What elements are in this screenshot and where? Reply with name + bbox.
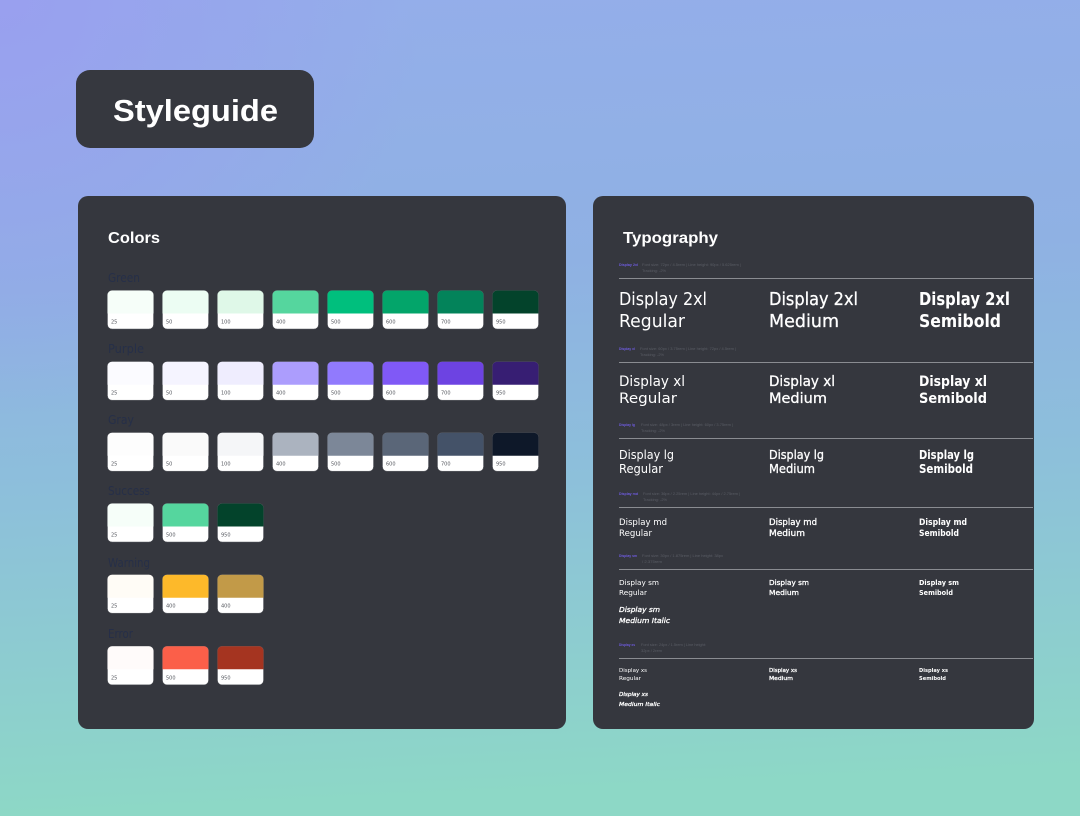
swatch row: purple: 400 (276, 391, 286, 397)
swatch row: purple: 600 (386, 391, 396, 397)
samples: display sm: Regular (619, 589, 647, 597)
spec: display 2xl (619, 262, 1033, 279)
samples: display xl: Medium (769, 391, 827, 407)
samples: display md: Display md (769, 518, 817, 528)
swatch row: purple: 500 (331, 391, 341, 397)
samples: display 2xl: Semibold (919, 312, 1001, 332)
spec: display 2xl: Font size: 72px / 4.5rem | Line height: 90px / 5.625rem | (642, 262, 741, 267)
swatch row: green (108, 290, 538, 329)
swatch row: error: 500 (166, 675, 176, 681)
samples: display md: Display md (619, 518, 667, 528)
section label: purple: Purple (108, 341, 144, 356)
swatch row: gray: 25 (111, 462, 117, 468)
samples: display sm (619, 579, 959, 625)
section label: success: Success (108, 483, 150, 498)
section label: gray: Gray (108, 412, 135, 427)
swatch row: purple: 950 (496, 391, 506, 397)
spec: display sm: Font size: 30px / 1.875rem | Line height: 38px (642, 553, 723, 558)
samples: display xs: Display xs (769, 668, 797, 674)
spec: display xl: Display xl (619, 346, 635, 351)
spec: display xs: Display xs (619, 642, 636, 647)
section label: warning: Warning (108, 555, 150, 570)
samples: display sm: Display sm (619, 606, 660, 614)
title badge (76, 70, 314, 148)
swatch row: green: 700 (441, 320, 451, 326)
spec: display md (619, 491, 1033, 508)
heading: typography: Typography (623, 230, 718, 247)
samples: display lg (619, 448, 974, 476)
samples: display lg: Display lg (619, 448, 674, 462)
swatch row: warning: 400 (166, 604, 176, 610)
swatch row: gray: 600 (386, 462, 396, 468)
samples: display 2xl: Display 2xl (769, 290, 858, 310)
samples: display xl: Regular (619, 391, 677, 407)
samples: display sm: Medium (769, 589, 799, 597)
samples: display lg: Display lg (919, 448, 974, 462)
samples: display md: Display md (919, 518, 967, 528)
swatch row: error (108, 646, 264, 685)
spec: display 2xl: Tracking: -2% (642, 268, 666, 273)
spec: display lg (619, 422, 1033, 439)
spec: display md: Font size: 36px / 2.25rem | Line height: 44px / 2.75rem | (643, 491, 740, 496)
samples: display xl: Display xl (919, 374, 987, 390)
title badge: Styleguide (113, 93, 278, 128)
samples: display xs (619, 668, 949, 708)
swatch row: purple: 700 (441, 391, 451, 397)
samples: display md (619, 518, 967, 539)
samples: display 2xl (619, 290, 1010, 332)
samples: display xs: Display xs (619, 692, 648, 698)
samples: display sm: Display sm (919, 579, 959, 587)
samples: display xl: Display xl (769, 374, 835, 390)
spec: display xl (619, 346, 1033, 363)
swatch row: success: 25 (111, 532, 117, 538)
samples: display xs: Medium Italic (619, 702, 660, 708)
swatch row: gray: 500 (331, 462, 341, 468)
samples: display xl: Semibold (919, 391, 987, 407)
swatch row: green: 600 (386, 320, 396, 326)
samples: display sm: Medium Italic (619, 617, 670, 625)
samples: display md: Medium (769, 529, 805, 539)
samples: display sm: Semibold (919, 589, 953, 597)
spec: display sm: / 2.375rem (642, 559, 663, 564)
swatch row: purple: 100 (221, 391, 231, 397)
spec: display md: Display md (619, 491, 638, 496)
swatch row: purple: 50 (166, 391, 172, 397)
samples: display md: Semibold (919, 529, 959, 539)
samples: display lg: Regular (619, 462, 663, 476)
section label: error: Error (108, 626, 134, 641)
swatch row: warning (108, 575, 264, 613)
samples: display xl: Display xl (619, 374, 685, 390)
swatch row: green: 50 (166, 320, 172, 326)
swatch row: warning: 25 (111, 604, 117, 610)
swatch row: success (108, 504, 264, 542)
swatch row: success: 500 (166, 532, 176, 538)
samples: display xs: Semibold (919, 676, 946, 682)
samples: display lg: Display lg (769, 448, 824, 462)
spec: display xl: Tracking: -2% (640, 352, 664, 357)
swatch row: gray: 50 (166, 462, 172, 468)
samples: display xs: Display xs (619, 668, 647, 674)
samples: display xl (619, 374, 987, 407)
spec: display md: Tracking: -2% (643, 497, 667, 502)
samples: display lg: Semibold (919, 462, 973, 476)
swatch row: gray: 950 (496, 462, 506, 468)
samples: display lg: Medium (769, 462, 815, 476)
spec: display sm (619, 553, 1033, 570)
swatch row: green: 950 (496, 320, 506, 326)
swatch row: error: 950 (221, 675, 231, 681)
samples: display 2xl: Display 2xl (919, 290, 1010, 310)
swatch row: gray (108, 433, 538, 471)
swatch row: green: 100 (221, 320, 231, 326)
spec: display 2xl: Display 2xl (619, 262, 638, 267)
swatch row: gray: 400 (276, 462, 286, 468)
section label: green: Green (108, 270, 140, 285)
samples: display sm: Display sm (769, 579, 809, 587)
spec: display lg: Display lg (619, 422, 635, 427)
swatch row: success: 950 (221, 532, 231, 538)
spec: display lg: Tracking: -2% (641, 428, 665, 433)
panel: colors (78, 196, 566, 729)
swatch row: purple: 25 (111, 391, 117, 397)
samples: display 2xl: Medium (769, 312, 839, 332)
swatch row: gray: 100 (221, 462, 231, 468)
spec: display xs: 32px / 2rem (641, 648, 663, 653)
spec: display xl: Font size: 60px / 3.75rem | Line height: 72px / 4.5rem | (640, 346, 736, 351)
swatch row: gray: 700 (441, 462, 451, 468)
samples: display 2xl: Display 2xl (619, 290, 707, 310)
heading: colors: Colors (108, 230, 160, 247)
swatch row: green: 500 (331, 320, 341, 326)
swatch row: green: 400 (276, 320, 286, 326)
samples: display sm: Display sm (619, 579, 659, 587)
panel: typography (593, 196, 1034, 729)
samples: display xs: Regular (619, 676, 642, 682)
spec: display sm: Display sm (619, 553, 637, 558)
spec: display xs: Font size: 24px / 1.5rem | Line height: (641, 642, 706, 647)
samples: display md: Regular (619, 529, 653, 539)
swatch row: error: 25 (111, 675, 117, 681)
spec: display lg: Font size: 48px / 3rem | Line height: 60px / 3.75rem | (641, 422, 733, 427)
samples: display xs: Medium (769, 676, 793, 682)
swatch row: green: 25 (111, 320, 117, 326)
spec: display xs (619, 642, 1033, 659)
samples: display 2xl: Regular (619, 312, 686, 332)
swatch row: warning: 400 (221, 604, 231, 610)
samples: display xs: Display xs (919, 668, 949, 674)
swatch row: purple (108, 362, 538, 400)
